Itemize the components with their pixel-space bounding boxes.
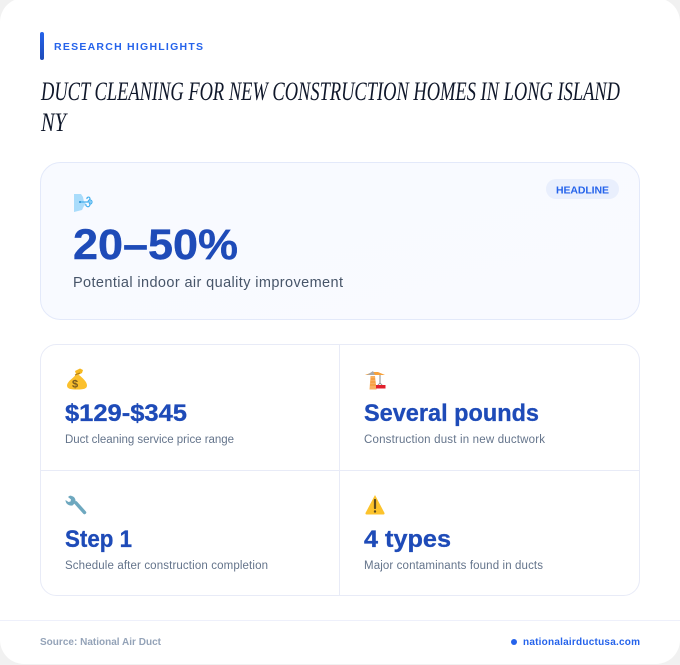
badge: HEADLINE (556, 184, 609, 196)
icon: wrench (66, 495, 84, 512)
badge (546, 179, 619, 199)
title: NY (40, 108, 68, 137)
icon: warning triangle (365, 495, 385, 514)
stat: price range (65, 368, 234, 446)
accent bar (40, 32, 44, 60)
website: nationalairductusa.com (523, 637, 640, 648)
header (40, 32, 203, 60)
stat: construction dust: Construction dust in new ductwork (364, 434, 545, 446)
panel: stat grid (40, 344, 640, 596)
icon: money bag (67, 368, 87, 390)
stat: contaminants: 4 types (364, 526, 451, 553)
stat: first step: Step 1 (65, 526, 132, 553)
stat: price range: $129-$345 (65, 400, 187, 427)
stat: price range: Duct cleaning service price range (65, 434, 234, 446)
stat: contaminants: Major contaminants found in ducts (364, 560, 543, 572)
icon: money bag: $ (72, 378, 78, 390)
stat: construction dust (364, 371, 545, 446)
stat: first step (65, 495, 268, 572)
source: Source: National Air Duct (40, 637, 162, 648)
stat: contaminants (364, 495, 543, 572)
eyebrow label: RESEARCH HIGHLIGHTS (54, 41, 203, 53)
panel: headline stat (40, 162, 640, 320)
footer (0, 620, 680, 648)
headline description: Potential indoor air quality improvement (73, 275, 343, 291)
stat: first step: Schedule after construction completion (65, 560, 268, 572)
headline value: 20–50% (73, 221, 238, 269)
stat: construction dust: Several pounds (364, 400, 539, 427)
title (40, 77, 620, 137)
icon: crane (365, 371, 386, 390)
icon: wind face (74, 194, 92, 212)
